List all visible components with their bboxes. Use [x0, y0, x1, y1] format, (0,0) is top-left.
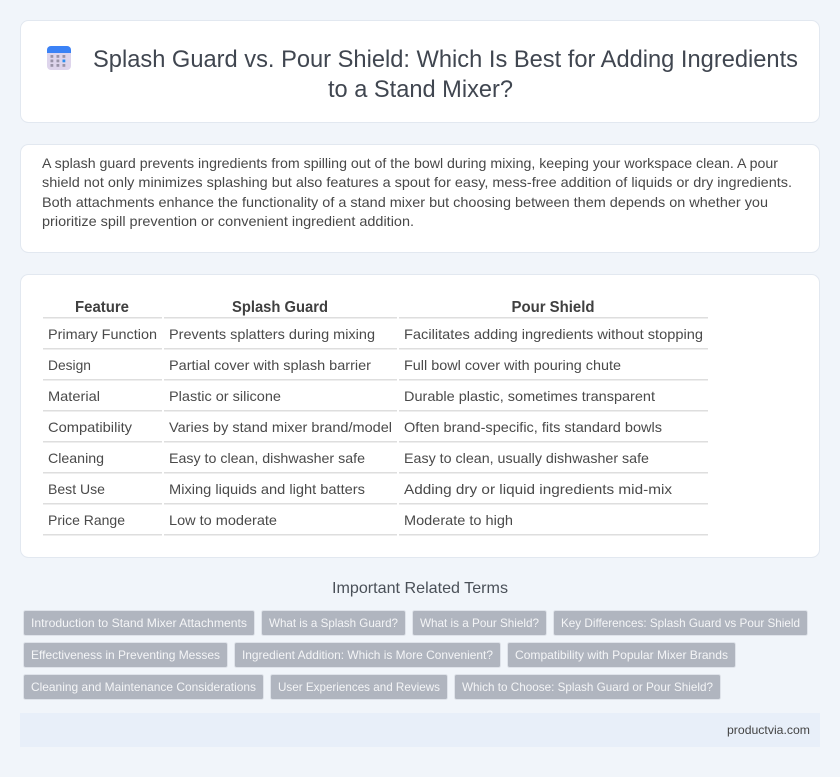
row: material: Durable plastic, sometimes transparent: [404, 388, 655, 404]
panel: title: [20, 20, 820, 122]
related term tags: Which to Choose: Splash Guard or Pour Shield?: [462, 680, 713, 694]
related term tags: User Experiences and Reviews: [278, 680, 440, 694]
table header: Splash Guard: [232, 299, 328, 316]
row: cleaning: Easy to clean, dishwasher safe: [169, 450, 365, 466]
row: best use: [48, 481, 672, 497]
row: cleaning: Cleaning: [48, 450, 104, 466]
row: design: Full bowl cover with pouring chute: [404, 357, 621, 373]
title text: Splash Guard vs. Pour Shield: Which Is Best for Adding Ingredients: [93, 46, 798, 73]
panel: introduction: [20, 144, 820, 252]
intro paragraph: Both attachments enhance the functionality of a stand mixer but choosing between them depends on whether you: [42, 194, 768, 210]
row: cleaning: Easy to clean, usually dishwasher safe: [404, 450, 649, 466]
row: compatibility: Compatibility: [48, 419, 132, 435]
footer: productvia.com: [727, 723, 810, 737]
table header: [75, 299, 594, 316]
intro paragraph: prioritize spill prevention or convenient ingredient addition.: [42, 213, 414, 229]
related term tags: What is a Pour Shield?: [420, 616, 539, 630]
title text: to a Stand Mixer?: [328, 76, 513, 103]
row: best use: Best Use: [48, 481, 105, 497]
row: design: Design: [48, 357, 91, 373]
related term tags: Effectiveness in Preventing Messes: [31, 648, 220, 662]
related term tags: [24, 610, 808, 700]
intro paragraph: A splash guard prevents ingredients from spilling out of the bowl during mixing, keeping your workspace clean. A pour: [42, 155, 778, 171]
row: design: [48, 357, 621, 373]
row: primary function: Prevents splatters during mixing: [169, 326, 375, 342]
row: compatibility: [48, 419, 662, 435]
row: design: Partial cover with splash barrier: [169, 357, 371, 373]
table header: Pour Shield: [512, 299, 594, 316]
row: cleaning: [48, 450, 649, 466]
icon: calendar: [47, 46, 71, 70]
row: best use: Adding dry or liquid ingredients mid-mix: [404, 481, 672, 497]
row: material: Plastic or silicone: [169, 388, 281, 404]
row: compatibility: Varies by stand mixer brand/model: [169, 419, 392, 435]
related term tags: Compatibility with Popular Mixer Brands: [515, 648, 728, 662]
row: material: Material: [48, 388, 100, 404]
related term tags: What is a Splash Guard?: [269, 616, 398, 630]
row: compatibility: Often brand-specific, fits standard bowls: [404, 419, 662, 435]
related term tags: Introduction to Stand Mixer Attachments: [31, 616, 247, 630]
row: primary function: Primary Function: [48, 326, 157, 342]
row: material: [48, 388, 655, 404]
title text: [93, 46, 798, 103]
related term tags: Cleaning and Maintenance Considerations: [31, 680, 256, 694]
row: primary function: [48, 326, 703, 342]
row: price range: Moderate to high: [404, 512, 513, 528]
row: best use: Mixing liquids and light batters: [169, 481, 365, 497]
panel: comparison table: [20, 274, 820, 558]
intro paragraph: shield not only minimizes splashing but also features a spout for easy, mess-free addition of liquids or dry ingredients.: [42, 174, 792, 190]
related term tags: Ingredient Addition: Which is More Convenient?: [242, 648, 493, 662]
related term tags: Key Differences: Splash Guard vs Pour Shield: [561, 616, 800, 630]
heading: important related terms: Important Related Terms: [332, 580, 508, 597]
table header: Feature: [75, 299, 129, 316]
row: price range: Low to moderate: [169, 512, 277, 528]
footer: [20, 713, 820, 747]
intro paragraph: [42, 155, 792, 229]
row: primary function: Facilitates adding ingredients without stopping: [404, 326, 703, 342]
row: price range: [48, 512, 513, 528]
row: price range: Price Range: [48, 512, 125, 528]
